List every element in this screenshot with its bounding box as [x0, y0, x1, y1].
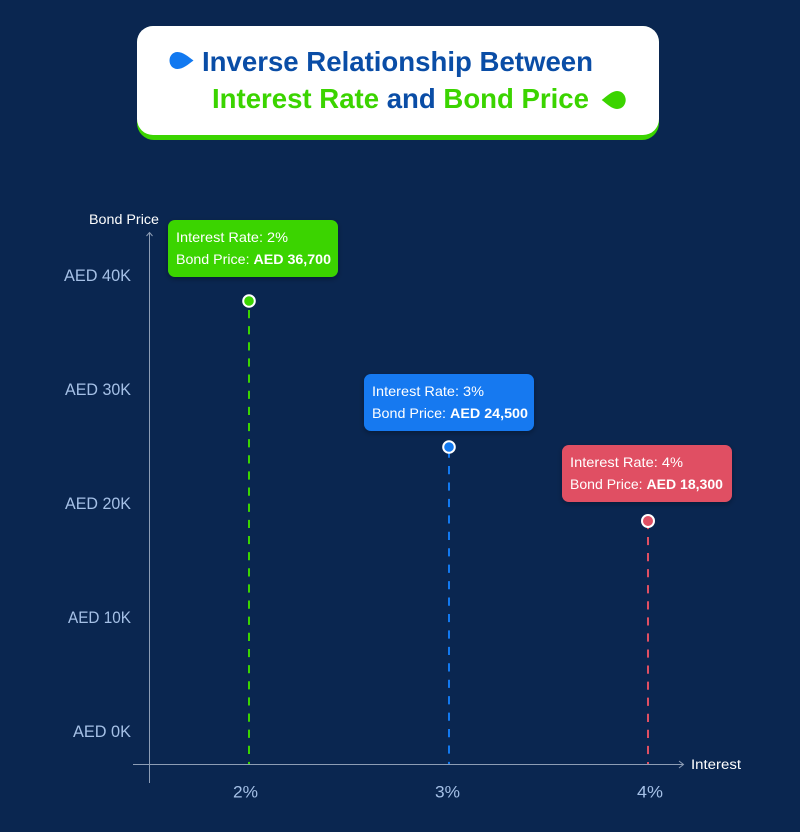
data point: 2%: [168, 220, 338, 764]
data point: 4%: [562, 445, 732, 764]
tooltip: 4%: [562, 445, 732, 502]
y axis: [146, 232, 152, 783]
x axis labels: 3%: [435, 784, 460, 802]
x axis labels: [233, 784, 663, 802]
icon: blue drop: [170, 52, 194, 69]
tooltip: 2%: [168, 220, 338, 277]
tooltip: 4%: Interest Rate: 4%: [570, 454, 683, 470]
y axis labels: [64, 267, 131, 741]
y axis labels: AED 10K: [68, 609, 131, 627]
title line 2: Interest Rate and Bond Price: [212, 83, 589, 114]
y axis labels: AED 40K: [64, 267, 131, 285]
tooltip: 3%: Interest Rate: 3%: [372, 383, 484, 399]
title card: [137, 26, 659, 140]
icon: green drop: [602, 91, 626, 109]
data point: 3%: [364, 374, 534, 764]
title line 1: Inverse Relationship Between: [202, 46, 593, 77]
x axis labels: 4%: [637, 784, 663, 802]
x axis: [133, 761, 684, 768]
tooltip: 4%: Bond Price: AED 18,300: [570, 476, 723, 492]
y axis title: Bond Price: [89, 212, 159, 227]
tooltip: 3%: [364, 374, 534, 431]
x axis labels: 2%: [233, 784, 258, 802]
y axis labels: AED 0K: [73, 723, 131, 741]
tooltip: 2%: Bond Price: AED 36,700: [176, 251, 331, 267]
tooltip: 2%: Interest Rate: 2%: [176, 229, 288, 245]
y axis labels: AED 30K: [65, 381, 131, 399]
tooltip: 3%: Bond Price: AED 24,500: [372, 405, 528, 421]
y axis labels: AED 20K: [65, 495, 131, 513]
x axis title: Interest: [691, 757, 741, 772]
